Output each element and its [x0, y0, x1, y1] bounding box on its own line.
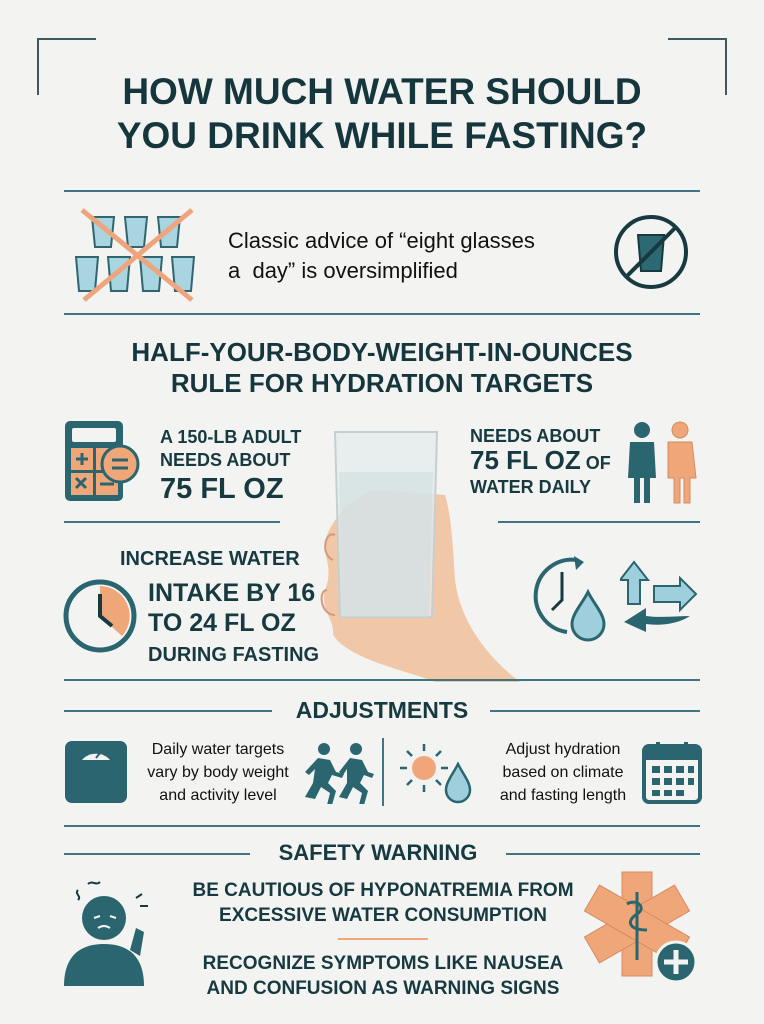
text: intake by: TO 24 FL OZ [148, 609, 296, 637]
text: intake by: INTAKE BY 16 [148, 579, 315, 607]
icon: sick person [64, 881, 148, 986]
text: adjust hydration [500, 741, 626, 804]
text: safety warning: EXCESSIVE WATER CONSUMPTION RECOGNIZE SYMPTOMS LIKE NAUSEA [203, 905, 563, 974]
heading: half your body weight: RULE FOR HYDRATION TARGETS [171, 368, 593, 398]
text: 150lb adult [160, 427, 302, 505]
text: needs about [470, 426, 611, 497]
text: intake by [148, 579, 319, 666]
icon: no glass [614, 215, 688, 289]
text: daily targets: vary by body weight [147, 764, 289, 781]
icon: calendar [642, 742, 702, 804]
text: adjust hydration: based on climate [503, 764, 623, 781]
text: 150lb adult: A 150-LB ADULT [160, 427, 301, 447]
icon: people [628, 422, 697, 504]
heading: adjustments: ADJUSTMENTS [296, 697, 468, 723]
text: safety warning [192, 880, 574, 999]
text: daily targets: and activity level [159, 787, 277, 804]
text: safety warning: AND CONFUSION AS WARNING SIGNS [207, 978, 559, 999]
title [117, 71, 647, 156]
text: daily targets: Daily water targets [152, 741, 284, 758]
text: needs about: 75 FL OZ OF [470, 445, 611, 475]
text: safety warning: BE CAUTIOUS OF HYPONATREMIA FROM [192, 880, 574, 901]
title: YOU DRINK WHILE FASTING? [117, 115, 647, 156]
text: needs about: NEEDS ABOUT [470, 426, 600, 446]
text: 150lb adult: NEEDS ABOUT [160, 450, 290, 470]
text: classic advice [228, 228, 535, 283]
icon: sun and drop [400, 744, 472, 804]
text: needs about: WATER DAILY [470, 477, 591, 497]
heading: half your body weight: HALF-YOUR-BODY-WEIGHT-IN-OUNCES [131, 337, 633, 367]
corner brackets [37, 38, 727, 95]
icon: runners [305, 743, 374, 804]
title: HOW MUCH WATER SHOULD [122, 71, 642, 112]
text: adjust hydration: Adjust hydration [506, 741, 620, 758]
icon: clock orange [64, 580, 136, 652]
icon: medical star [584, 872, 694, 980]
heading: safety warning: SAFETY WARNING [279, 840, 477, 865]
icon: clock with drop [534, 556, 606, 642]
text: intake by: DURING FASTING [148, 644, 319, 666]
text: classic advice: a day” is oversimplified [228, 258, 458, 283]
icon: calculator [65, 421, 140, 501]
text: daily targets [147, 741, 289, 804]
heading: half your body weight [131, 337, 633, 398]
image: hand holding glass [320, 431, 520, 682]
text: 150lb adult: 75 FL OZ [160, 473, 284, 505]
text: adjust hydration: and fasting length [500, 787, 626, 804]
icon: scale [65, 741, 127, 803]
text: increase water: INCREASE WATER [120, 548, 300, 570]
text: classic advice: Classic advice of “eight glasses [228, 228, 535, 253]
icon: arrows [620, 560, 698, 632]
icon: crossed glasses [74, 208, 196, 302]
